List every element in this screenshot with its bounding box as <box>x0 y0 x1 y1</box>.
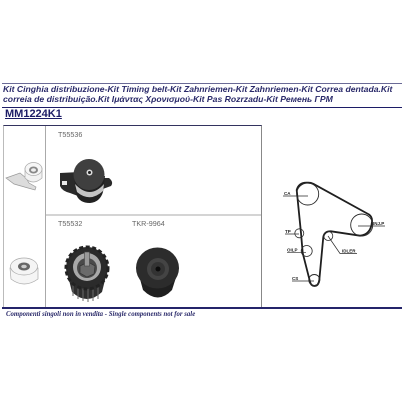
idler pulley <box>324 232 333 240</box>
part code TKR-9964: TKR-9964 <box>132 219 165 228</box>
camshaft pulley CA <box>297 183 319 205</box>
diagram labels: INJ.P <box>373 221 384 226</box>
diagram labels: CA <box>284 191 291 196</box>
table column divider <box>45 126 46 309</box>
icon: idler pulley TKR-9964 <box>136 248 179 298</box>
oil pump pulley <box>301 246 312 256</box>
footer rule <box>2 307 402 308</box>
belt <box>297 183 372 286</box>
panel: parts table <box>3 125 262 308</box>
diagram labels: IDLER <box>342 248 356 254</box>
part number: MM1224K1 <box>5 108 62 120</box>
diagram labels: OILP <box>287 248 298 252</box>
icon: tensioner T55536 <box>60 159 112 203</box>
icon: toothed pulley T55532 <box>66 247 108 302</box>
footer note: Componenti singoli non in vendita - Single components not for sale <box>6 311 195 318</box>
icon: tensioner sketch <box>6 162 42 190</box>
part code T55536: T55536 <box>58 130 82 139</box>
heading: multilingual kit title: correia de distribuição.Kit Ιμάντας Χρονισμού-Kit Pas Rozrzadu-Kit Ремень ГРМ <box>3 94 333 104</box>
part code T55532: T55532 <box>58 219 82 228</box>
leader lines <box>283 196 385 281</box>
crankshaft pulley CS <box>309 274 320 286</box>
table row divider <box>46 214 261 216</box>
heading rule <box>2 106 402 108</box>
belt routing diagram <box>283 183 385 286</box>
top rule <box>2 83 402 84</box>
diagram labels: TP <box>285 229 291 234</box>
injection pump pulley <box>351 214 373 236</box>
diagram labels <box>284 191 384 281</box>
icon: idler pulley sketch <box>10 258 38 284</box>
heading: multilingual kit title <box>3 84 393 104</box>
heading: multilingual kit title: Kit Cinghia distribuzione-Kit Timing belt-Kit Zahnriemen-Kit Zahnriemen-Kit Correa dentada.Kit <box>3 84 392 94</box>
tensioner pulley TP <box>295 229 304 238</box>
diagram labels: CS <box>292 276 298 281</box>
